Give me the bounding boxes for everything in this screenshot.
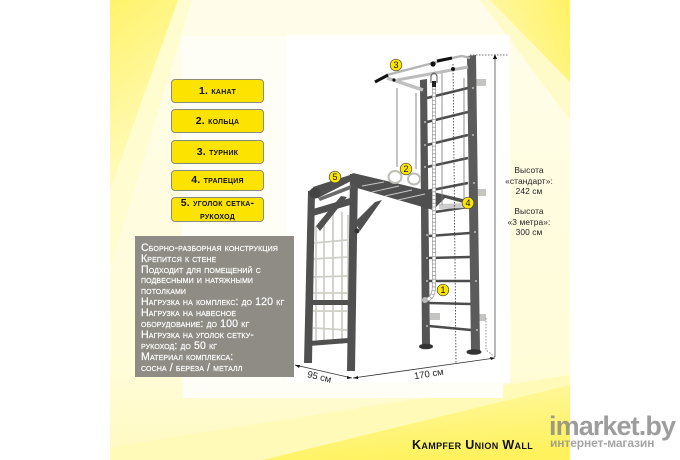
legend button 1: 1. канат: [199, 84, 236, 96]
legend button 2: 2. кольца: [196, 114, 239, 126]
wall mount stubs: [430, 79, 486, 321]
legend button 5: [171, 197, 264, 222]
specifications panel: оборудование: до 100 кг: [141, 318, 249, 330]
watermark: imarket.by: [549, 411, 675, 441]
marker 5: [329, 171, 341, 183]
legend button 3: 3. турник: [197, 146, 238, 158]
height label 3 metres: «3 метра»:: [508, 217, 550, 227]
net: [313, 212, 348, 344]
marker 1: [437, 284, 449, 296]
legend button 2: [171, 109, 264, 133]
specifications panel: Сборно-разборная конструкция: [141, 242, 278, 254]
numbered markers: [329, 59, 474, 296]
platform frame left posts: [304, 174, 382, 371]
marker 2: [400, 163, 412, 175]
legend button 1: [171, 79, 264, 103]
trapeze bar: [439, 73, 466, 209]
gymnastic rings with straps: [388, 88, 420, 184]
specifications panel: [135, 236, 294, 377]
specifications panel: потолками: [141, 285, 186, 297]
height label standard: 242 см: [516, 186, 542, 196]
legend button 5: рукоход: [200, 210, 235, 222]
climbing rope: [422, 82, 434, 303]
width label: 170 см: [413, 367, 444, 382]
marker 1: 1: [440, 285, 446, 295]
height label standard: «стандарт»:: [505, 176, 553, 186]
specifications panel: сосна / береза / металл: [141, 362, 242, 374]
marker 4: [462, 197, 474, 209]
marker 3: 3: [393, 60, 399, 70]
specifications panel: Подходит для помещений с: [141, 264, 261, 276]
depth label: 95 см: [306, 369, 332, 386]
marker 2: 2: [403, 164, 409, 174]
marker 4: 4: [465, 198, 471, 208]
wall bars rails: [420, 79, 430, 345]
legend button 4: [171, 170, 264, 191]
specifications panel: Нагрузка на комплекс: до 120 кг: [141, 296, 284, 308]
specifications panel: подвесными и натяжными: [141, 274, 253, 286]
height label 3 metres: Высота: [514, 206, 544, 216]
specifications panel: Нагрузка на уголок сетку-: [141, 329, 254, 341]
height label standard: Высота: [514, 165, 544, 175]
specifications panel: рукоход: до 50 кг: [141, 340, 217, 352]
specifications panel: Материал комплекса:: [141, 351, 233, 363]
wall bars, platform, net and accessories illustration: [295, 54, 508, 379]
product title: Kampfer Union Wall: [412, 438, 533, 452]
wall bars rungs: [427, 88, 471, 330]
specifications panel: Крепится к стене: [141, 253, 216, 265]
height label 3 metres: [508, 206, 550, 237]
height label standard: [505, 165, 553, 196]
platform monkey bars: [350, 173, 467, 210]
width and depth dimension lines: [295, 357, 495, 379]
watermark subtitle: интернет-магазин: [550, 436, 654, 450]
legend button 5: 5. уголок сетка-: [181, 196, 254, 208]
height dimension line: [453, 54, 508, 363]
marker 3: [390, 59, 402, 71]
legend button 3: [171, 140, 264, 164]
marker 5: 5: [332, 172, 338, 182]
pull-up bar: [375, 56, 470, 90]
legend button 4: 4. трапеция: [191, 174, 244, 186]
specifications panel: Нагрузка на навесное: [141, 307, 236, 319]
height label 3 metres: 300 см: [516, 227, 542, 237]
